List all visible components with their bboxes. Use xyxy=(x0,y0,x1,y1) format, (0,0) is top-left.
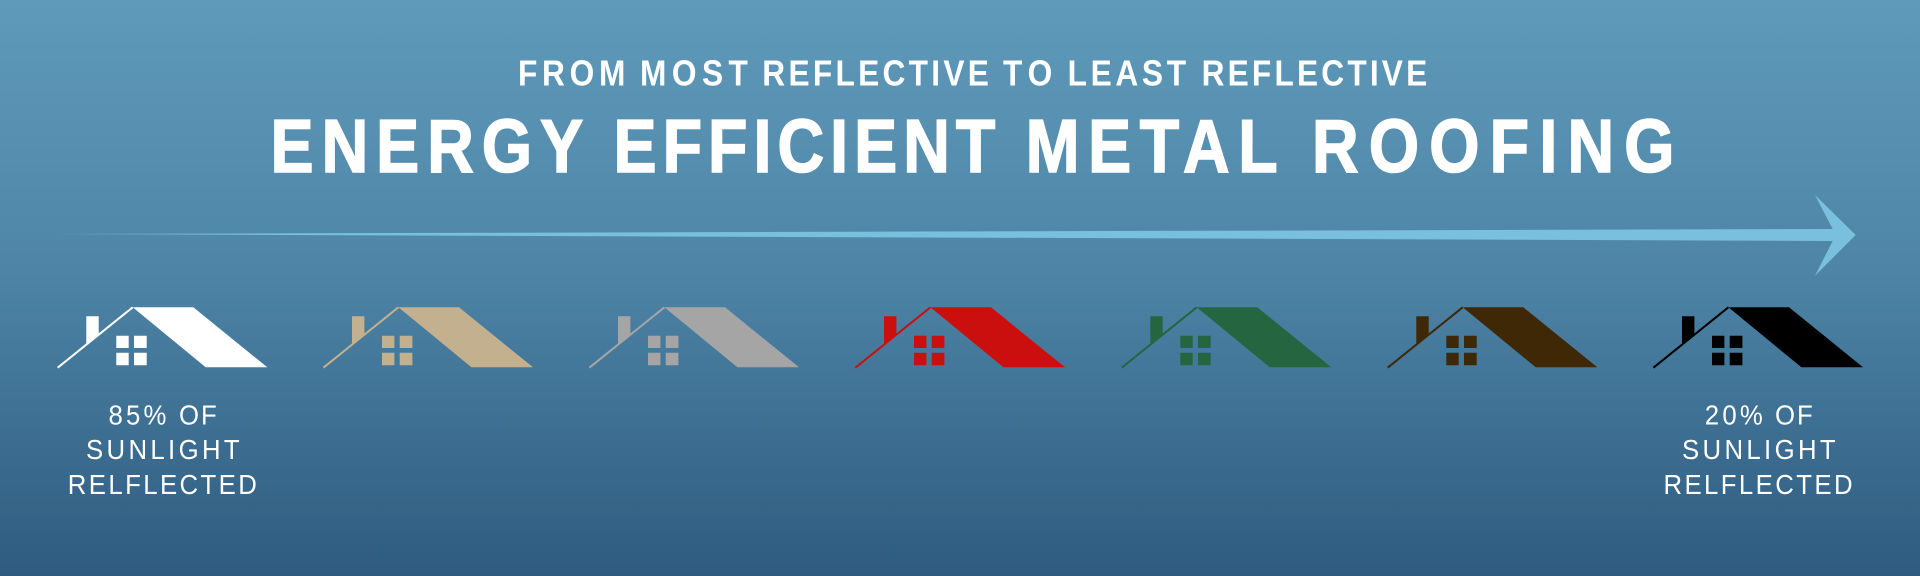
label: 85% of sunlight reflected: RELFLECTED xyxy=(68,469,257,500)
subtitle: FROM xyxy=(518,54,625,94)
house: tan roof xyxy=(323,307,533,368)
label: 85% of sunlight reflected xyxy=(68,399,257,500)
label: 20% of sunlight reflected xyxy=(1664,399,1853,500)
label: 20% of sunlight reflected: SUNLIGHT xyxy=(1682,434,1836,465)
title: ROOFING xyxy=(1312,105,1674,188)
subtitle: REFLECTIVE xyxy=(1202,54,1427,94)
house: white roof xyxy=(58,307,267,368)
label: 85% of sunlight reflected: SUNLIGHT xyxy=(86,434,240,465)
subtitle: MOST xyxy=(640,54,748,94)
house: black roof xyxy=(1653,307,1863,368)
subtitle xyxy=(518,54,1427,94)
label: 20% of sunlight reflected: 20% xyxy=(1705,399,1763,431)
label: 85% of sunlight reflected: 85% xyxy=(108,399,166,431)
label: 85% of sunlight reflected: OF xyxy=(179,399,217,431)
title: ENERGY xyxy=(270,105,583,188)
title: METAL xyxy=(1026,105,1278,188)
subtitle: TO xyxy=(1003,54,1052,94)
house: green roof xyxy=(1122,307,1331,368)
label: 20% of sunlight reflected: OF xyxy=(1775,399,1813,431)
title: EFFICIENT xyxy=(614,105,995,188)
subtitle: REFLECTIVE xyxy=(762,54,989,94)
house: grey roof xyxy=(589,307,799,368)
house: red roof xyxy=(855,307,1065,368)
house: brown roof xyxy=(1388,307,1597,368)
label: 20% of sunlight reflected: RELFLECTED xyxy=(1664,469,1853,500)
arrow: most to least reflective xyxy=(40,195,1856,276)
title xyxy=(270,105,1674,188)
subtitle: LEAST xyxy=(1068,54,1186,94)
